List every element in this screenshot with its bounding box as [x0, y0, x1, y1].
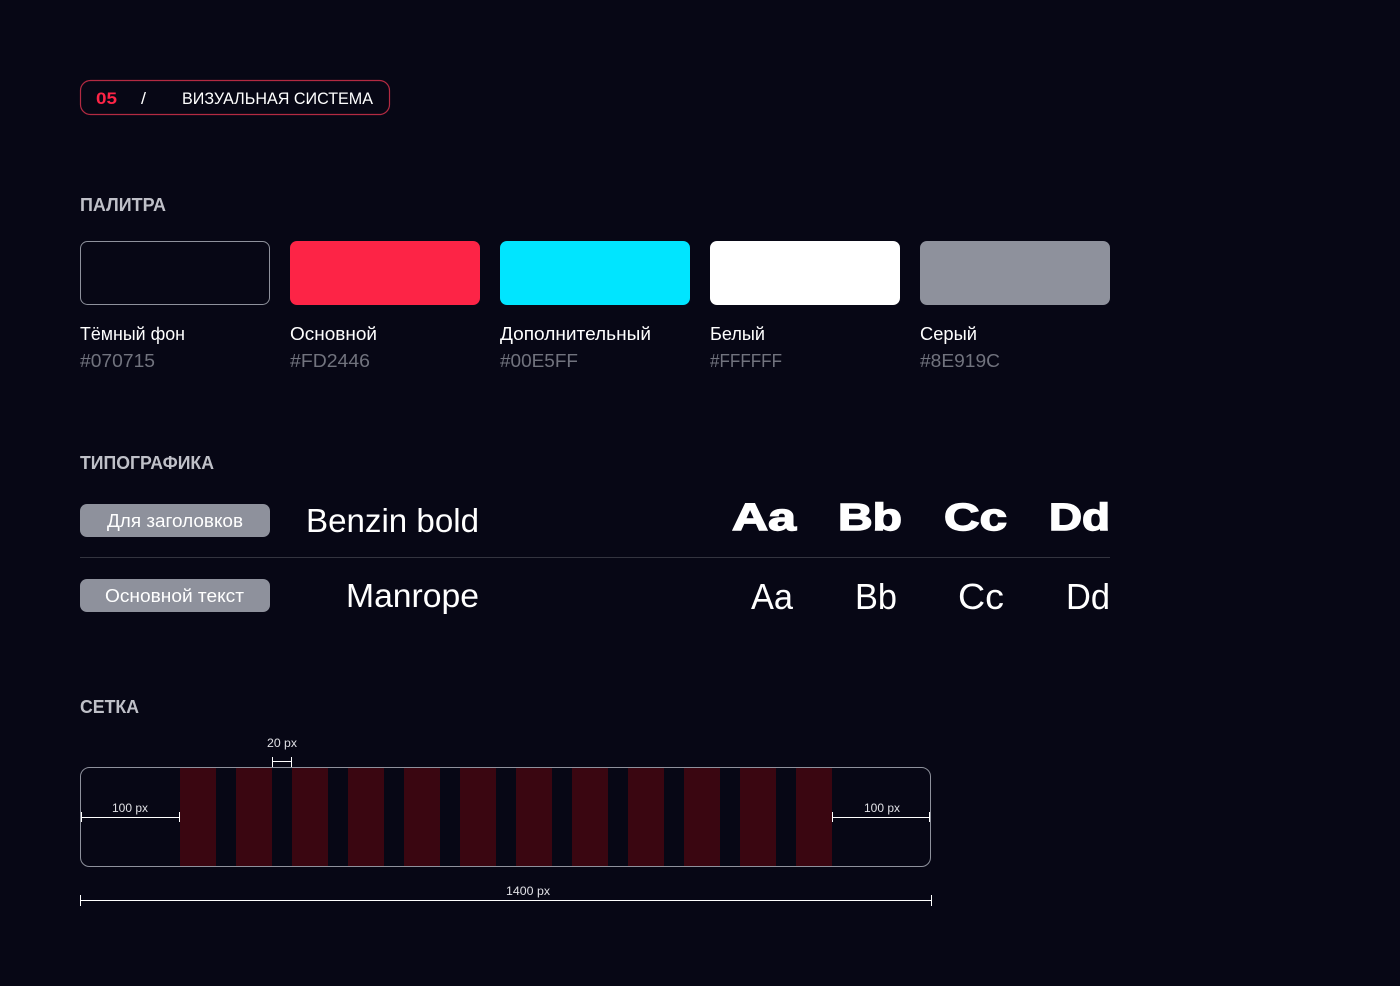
glyph samples: Manrope: Cc	[958, 576, 1004, 617]
total width dimension: 1400 px: 1400 px	[506, 884, 550, 898]
swatch: white: Белый	[710, 324, 765, 344]
pill: body text	[80, 579, 270, 612]
heading: typography: ТИПОГРАФИКА	[80, 453, 214, 473]
swatch: secondary: #00E5FF	[500, 351, 578, 371]
right margin dimension: 100 px	[832, 801, 930, 822]
glyph samples: Manrope: Dd	[1066, 576, 1110, 617]
swatch: primary: Основной	[290, 324, 377, 344]
glyph samples: Benzin: Bb	[838, 497, 902, 539]
total width dimension: 1400 px	[80, 884, 932, 906]
swatch: gray: #8E919C	[920, 351, 1000, 371]
glyph samples: Manrope	[751, 576, 1110, 617]
section tag: ВИЗУАЛЬНАЯ СИСТЕМА	[182, 89, 374, 108]
glyph samples: Benzin: Aa	[732, 497, 797, 539]
grid frame	[80, 768, 930, 866]
swatch: gray: Серый	[920, 324, 977, 344]
swatch: secondary: Дополнительный	[500, 324, 651, 344]
pill: body text: Основной текст	[105, 586, 244, 606]
font name: Benzin bold: Benzin bold	[306, 502, 479, 539]
pill: for headings: Для заголовков	[107, 511, 243, 531]
gutter dimension: 20 px: 20 px	[267, 736, 297, 750]
glyph samples: Benzin: Dd	[1049, 497, 1110, 539]
swatch: dark background: Тёмный фон	[80, 324, 185, 344]
left margin dimension: 100 px: 100 px	[112, 801, 148, 815]
font name: Manrope: Manrope	[346, 577, 479, 614]
swatch: white	[710, 241, 900, 371]
glyph samples: Benzin: Cc	[944, 497, 1007, 539]
section tag: /	[141, 89, 146, 108]
section tag: 05	[96, 89, 117, 108]
panel: palette swatches	[80, 241, 1110, 371]
swatch: dark background: #070715	[80, 351, 155, 371]
swatch: primary: #FD2446	[290, 351, 370, 371]
panel: body font row	[80, 576, 1110, 617]
heading: palette: ПАЛИТРА	[80, 195, 166, 215]
pill: for headings	[80, 504, 270, 537]
glyph samples: Manrope: Bb	[855, 576, 897, 617]
panel: heading font row	[80, 497, 1110, 539]
swatch: white: #FFFFFF	[710, 351, 782, 371]
gutter dimension: 20 px	[267, 736, 297, 767]
right margin dimension: 100 px: 100 px	[864, 801, 900, 815]
glyph samples: Benzin	[732, 497, 1110, 539]
heading: grid: СЕТКА	[80, 697, 139, 717]
grid columns	[180, 767, 832, 867]
swatch: dark background	[80, 242, 270, 371]
swatch: primary	[290, 241, 480, 371]
swatch: gray	[920, 241, 1110, 371]
swatch: secondary	[500, 241, 690, 371]
chart: layout grid	[80, 736, 930, 867]
glyph samples: Manrope: Aa	[751, 576, 794, 617]
section tag	[80, 80, 390, 114]
left margin dimension: 100 px	[81, 801, 180, 822]
